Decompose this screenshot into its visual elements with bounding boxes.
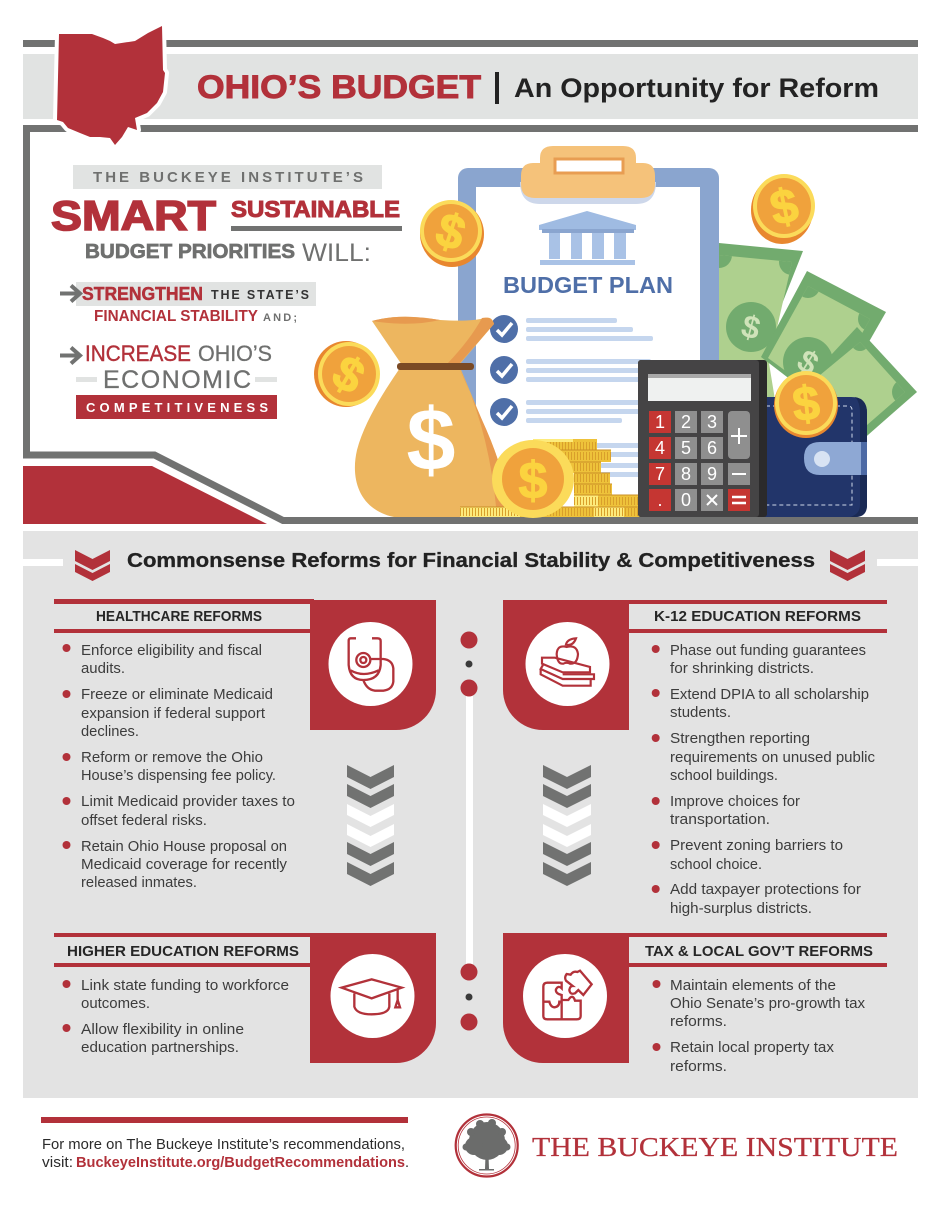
icon: money bag: $ [407,390,455,489]
icon: calculator: 1 [655,412,665,432]
chevron stack left [347,765,394,886]
callout: increase: ECONOMIC [103,366,251,394]
section heading: TAX & LOCAL GOV’T REFORMS [645,943,873,960]
bullet list: expansion if federal support [81,706,265,722]
section heading: HEALTHCARE REFORMS [96,608,262,625]
callout: strengthen: STRENGTHEN [82,284,203,304]
icon block: puzzle [503,933,629,1063]
icon: coins floating: $ [766,179,803,236]
hero frame [23,128,918,524]
bullet list: Freeze or eliminate Medicaid [81,687,273,703]
chevron stack right [543,765,591,886]
bullet list: offset federal risks. [81,813,207,829]
bullet list: Enforce eligibility and fiscal [81,643,262,659]
icon: large gold coin [492,440,574,518]
bullet list: declines. [81,724,139,740]
map of Ohio [57,26,165,145]
icon: green banknotes: $ [791,342,825,382]
footer: recommendations link: BuckeyeInstitute.org/BudgetRecommendations [76,1155,405,1171]
icon: green banknotes: $ [738,307,764,347]
icon: calculator [638,360,767,517]
icon: calculator: 3 [707,412,717,432]
bullet list: transportation. [670,812,770,828]
icon block: stethoscope [310,600,436,730]
heading: Budget Plan: BUDGET PLAN [503,272,673,298]
bullet list: outcomes. [81,996,150,1012]
bullet list: Retain Ohio House proposal on [81,839,287,855]
footer: recommendations link [41,1117,409,1171]
callout: strengthen: FINANCIAL STABILITY [94,308,259,325]
bullet list: released inmates. [81,875,197,891]
icon block: graduation cap [310,933,436,1063]
heading: Sustainable: SUSTAINABLE [231,196,400,222]
icon: calculator: 8 [681,464,691,484]
bullet list: school choice. [670,857,762,873]
center timeline [460,632,478,1030]
icon: money bag [355,317,512,517]
bullet list: for shrinking districts. [670,661,814,677]
icon: government building [539,211,636,265]
illustration: budget plan scene [314,146,918,518]
hero text block [51,165,402,419]
icon: clipboard [458,146,719,517]
bullet list: Add taxpayer protections for [670,882,861,898]
bullet list [652,978,866,1075]
footer: recommendations link: For more on The Buckeye Institute’s recommendations, [42,1137,405,1153]
section heading: HIGHER EDUCATION REFORMS [67,943,299,960]
callout: strengthen: AND; [263,312,297,324]
bullet list: Ohio Senate’s pro-growth tax [670,996,866,1012]
section: healthcare reforms [54,599,436,891]
bullet list: Allow flexibility in online [81,1022,244,1038]
bullet list: Link state funding to workforce [81,978,289,994]
bullet list: Medicaid coverage for recently [81,857,288,873]
section: k-12 education reforms [503,600,887,917]
bullet list: House’s dispensing fee policy. [81,768,276,784]
icon: calculator: 2 [681,412,691,432]
icon: coin on wallet: $ [790,377,823,432]
callout: increase: OHIO’S [198,341,272,366]
bullet list: Phase out funding guarantees [670,643,866,659]
icon: coin stack [460,439,658,517]
footer: recommendations link: . [405,1155,409,1171]
icon: large gold coin: $ [519,452,548,510]
callout: increase [60,341,277,419]
section heading: K-12 EDUCATION REFORMS [654,608,861,625]
icon: red chevrons left [75,550,110,581]
icon: calculator: 7 [655,464,665,484]
bullet list: Extend DPIA to all scholarship [670,687,869,703]
panel heading: Commonsense Reforms for Financial Stability & Competitiveness [127,550,815,572]
icon: calculator: 9 [707,464,717,484]
bullet list: Reform or remove the Ohio [81,750,263,766]
bullet list: Retain local property tax [670,1040,835,1056]
logo emblem: tree in ring [456,1114,518,1176]
bullet list: reforms. [670,1059,727,1075]
callout: strengthen [60,282,316,325]
icon: calculator: 0 [681,490,691,510]
section: higher education reforms [54,933,436,1063]
icon: wallet [760,397,867,517]
checklist [490,315,653,477]
subtitle: An Opportunity for Reform [514,73,879,103]
icon: calculator: 4 [655,438,665,458]
bullet list: education partnerships. [81,1040,239,1056]
icon: coins floating [314,174,815,407]
bullet list: Prevent zoning barriers to [670,838,843,854]
icon: coin on wallet [774,371,838,438]
icon block: books and apple [503,600,629,730]
bullet list: Improve choices for [670,794,800,810]
clipboard clip [520,146,656,204]
heading: The Buckeye Institute's: THE BUCKEYE INSTITUTE’S [93,169,363,186]
icon: coins floating: $ [323,346,373,405]
bullet list: Strengthen reporting [670,731,810,747]
heading: Budget priorities will: BUDGET PRIORITIES [85,240,295,263]
icon: red chevrons right [830,550,865,581]
icon: calculator: 6 [707,438,717,458]
section: tax and local government reforms [503,933,887,1075]
bullet list: school buildings. [670,768,778,784]
title banner [23,40,918,119]
bullet list: high-surplus districts. [670,901,812,917]
bullet list: requirements on unused public [670,750,875,766]
bullet list: Maintain elements of the [670,978,836,994]
icon: green banknotes [706,242,918,442]
bullet list [652,643,875,917]
title: Ohio's Budget: OHIO’S BUDGET [197,69,482,105]
bullet list: audits. [81,661,125,677]
bullet list: Limit Medicaid provider taxes to [81,794,295,810]
logo: The Buckeye Institute [456,1114,898,1176]
callout: increase: COMPETITIVENESS [86,400,268,415]
hero text block: WILL: [302,239,371,267]
bullet list [62,643,295,891]
icon: calculator: . [657,490,663,510]
heading: Smart: SMART [51,192,216,239]
footer: recommendations link: visit: [42,1155,73,1171]
icon: coins floating: $ [430,203,472,262]
callout: increase: INCREASE [85,341,191,366]
bullet list: reforms. [670,1014,727,1030]
icon: calculator: 5 [681,438,691,458]
panel: commonsense reforms [23,531,918,1098]
logo wordmark: THE BUCKEYE INSTITUTE [532,1132,898,1162]
callout: strengthen: THE STATE’S [211,288,309,302]
bullet list: students. [670,705,731,721]
bullet list [62,978,289,1056]
